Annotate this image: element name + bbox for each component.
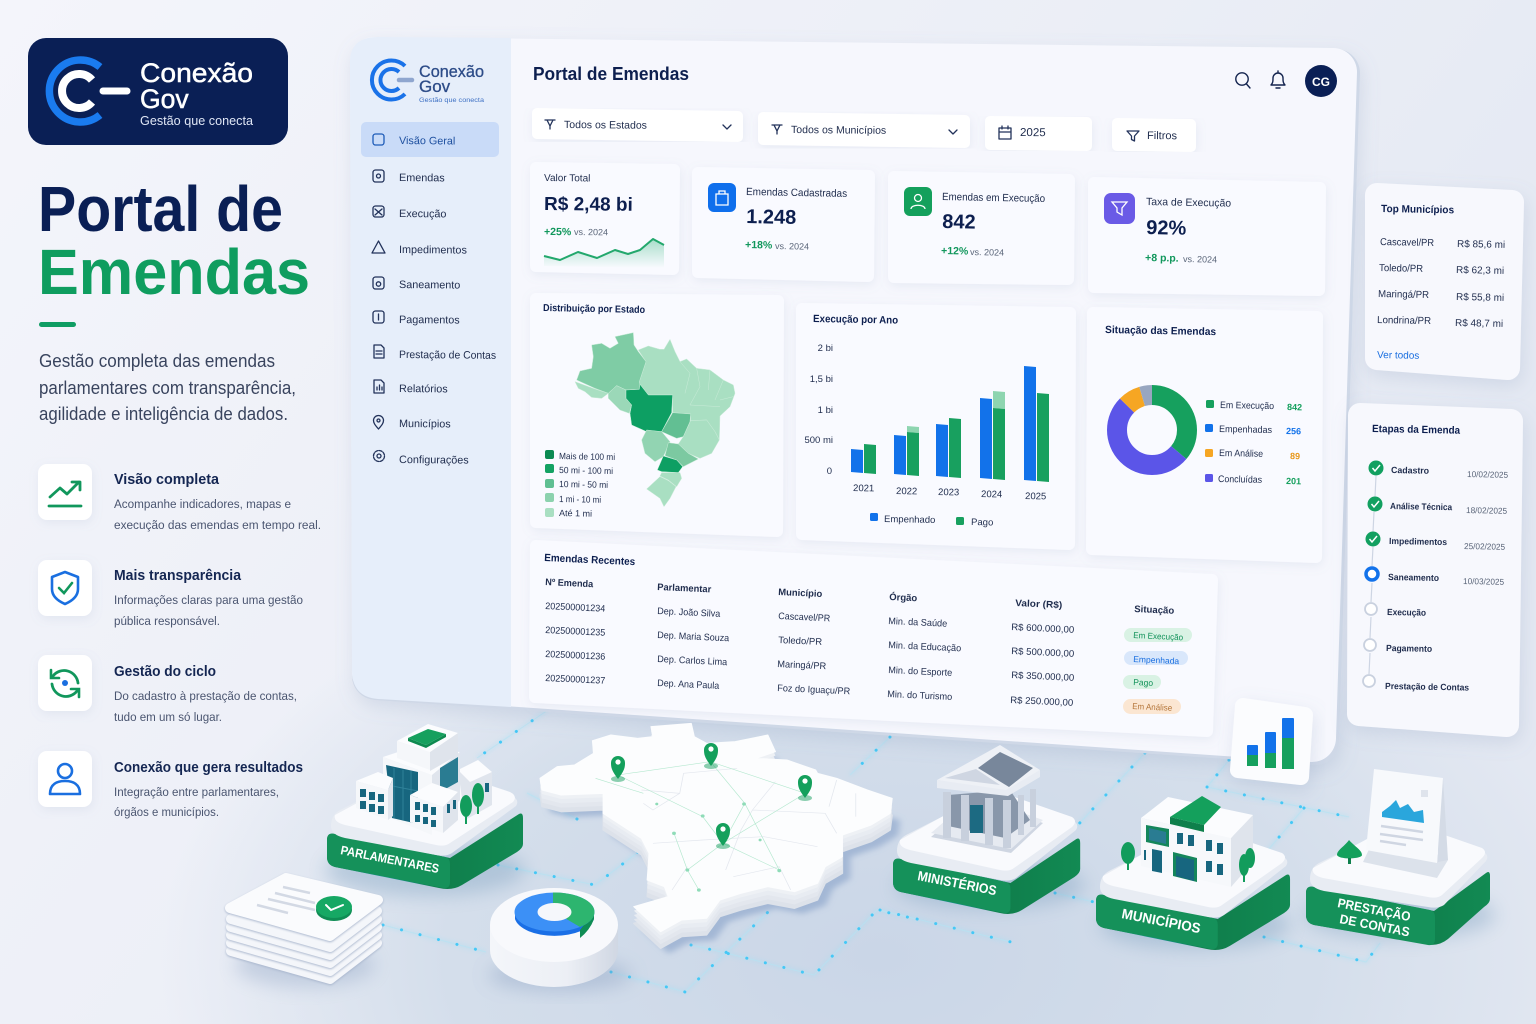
filter: estados (537, 113, 738, 137)
panel: execução por ano (802, 309, 1070, 544)
kpi: taxa de execução: +8 p.p. (1145, 252, 1179, 265)
feature: conexão que gera resultados (38, 751, 303, 819)
sidebar nav (361, 122, 499, 467)
donut legend: 256 (1286, 426, 1301, 436)
logo text: Gestão que conecta (140, 114, 253, 128)
bar chart (851, 366, 1049, 482)
filter button: Filtros (1147, 130, 1178, 142)
feature: gestão do ciclo: Do cadastro à prestação de contas, (114, 689, 297, 703)
panel: distribuição por estado (536, 299, 778, 531)
kpi: emendas cadastradas: +18% (745, 239, 773, 252)
feature: mais transparência: Mais transparência (114, 568, 242, 584)
building (356, 724, 492, 835)
feature: conexão que gera resultados: Integração entre parlamentares, (114, 785, 279, 799)
year labels: 2022 (896, 486, 917, 497)
sparkline (544, 239, 664, 268)
table row 1: Min. da Saúde (888, 616, 947, 630)
axis labels: 1 bi (818, 405, 833, 416)
nav item: municípios (374, 416, 451, 430)
platform: municípios: MUNICÍPIOS (1120, 905, 1202, 936)
label text (1336, 895, 1412, 940)
sidebar logo: Gestão que conecta (419, 97, 484, 104)
table header: Valor (R$) (1015, 598, 1062, 611)
step saneamento: Saneamento (1388, 572, 1440, 583)
trees (1121, 842, 1255, 882)
municipality rows: R$ 55,8 mi (1456, 292, 1504, 304)
municipality rows: R$ 62,3 mi (1456, 265, 1504, 277)
logo text: Conexão (140, 58, 253, 88)
kpi: taxa de execução: vs. 2024 (1183, 254, 1217, 265)
municipality rows (1377, 237, 1505, 330)
axis labels: 1,5 bi (810, 374, 833, 385)
feature: visão completa: Acompanhe indicadores, mapas e (114, 497, 291, 511)
step prestação de contas (1363, 675, 1469, 693)
table row 2: Dep. Maria Souza (657, 630, 730, 644)
nav item: impedimentos (372, 241, 468, 257)
nav item: saneamento: Saneamento (399, 279, 460, 292)
3D Brazil map (540, 723, 900, 954)
nav item: pagamentos (373, 311, 460, 327)
kpi: emendas em execução: vs. 2024 (970, 247, 1004, 258)
table row 4: Dep. Ana Paula (657, 678, 720, 692)
label text: PRESTAÇÃO (1336, 895, 1412, 924)
panel: etapas da emenda: Etapas da Emenda (1372, 423, 1460, 437)
kpi: emendas cadastradas: 1.248 (746, 206, 796, 229)
panel: situação das emendas: Situação das Emendas (1105, 324, 1216, 338)
nav item: prestação de contas (374, 345, 497, 362)
intro text: parlamentares com transparência, (39, 378, 296, 398)
icon: trend chart (38, 464, 92, 520)
map legend: 1 mi - 10 mi (559, 494, 601, 505)
nav item: pagamentos: Pagamentos (399, 314, 460, 327)
icon: purple chart (1104, 193, 1135, 224)
panel: execução por ano: Execução por Ano (813, 313, 898, 327)
table header (545, 577, 1175, 617)
map legend: Mais de 100 mi (559, 451, 615, 462)
icon: logo C (49, 60, 127, 122)
table header: Órgão (889, 591, 918, 604)
report document (1337, 769, 1448, 878)
step análise técnica: Análise Técnica (1390, 501, 1453, 512)
filter: municípios (763, 117, 965, 143)
logo text (140, 58, 253, 128)
icon: person (38, 751, 92, 807)
kpi: taxa de execução: 92% (1146, 217, 1187, 240)
nav item: municípios: Municípios (399, 418, 451, 430)
map legend: 50 mi - 100 mi (559, 465, 613, 476)
table row 2: 202500001235 (545, 625, 605, 639)
table row 1 (545, 601, 1192, 642)
icon: search (1236, 73, 1250, 88)
panel: etapas da emenda (1359, 415, 1511, 725)
sidebar logo: Conexão (419, 62, 484, 81)
nav item: prestação de contas: Prestação de Contas (399, 349, 497, 362)
kpi: emendas cadastradas: vs. 2024 (775, 241, 809, 252)
table row 3: Maringá/PR (777, 659, 827, 672)
timeline connector (1369, 476, 1376, 674)
feature: conexão que gera resultados: órgãos e municípios. (114, 805, 219, 819)
table header: Nº Emenda (545, 577, 594, 590)
table row 1: 202500001234 (545, 601, 605, 615)
feature: visão completa: Visão completa (114, 472, 220, 488)
kpi: emendas em execução: 842 (942, 211, 976, 234)
sidebar logo (372, 60, 484, 104)
icon: cycle arrows (38, 655, 92, 711)
municipality rows: R$ 85,6 mi (1457, 239, 1505, 251)
step saneamento: 10/03/2025 (1463, 576, 1504, 587)
platform: parlamentares (325, 724, 525, 896)
step impedimentos (1366, 532, 1505, 552)
intro text: agilidade e inteligência de dados. (39, 404, 288, 424)
3D donut (514, 892, 594, 938)
nav item: relatórios: Relatórios (399, 383, 448, 395)
donut chart (1117, 395, 1187, 465)
platform: ministérios: MINISTÉRIOS (916, 868, 998, 898)
nav item: emendas: Emendas (399, 172, 445, 184)
panel: situação das emendas (1092, 313, 1317, 557)
step prestação de contas: Prestação de Contas (1385, 681, 1469, 693)
map: Brazil choropleth (575, 333, 735, 507)
filter: year: 2025 (1020, 127, 1046, 139)
step cadastro: 10/02/2025 (1467, 469, 1508, 480)
table row 2: Toledo/PR (778, 635, 822, 648)
intro text (39, 351, 296, 424)
table header: Município (778, 587, 823, 600)
kpi: taxa de execução: Taxa de Execução (1146, 196, 1231, 210)
icon: bell (1271, 71, 1285, 88)
donut legend: 201 (1286, 476, 1301, 486)
feature: gestão do ciclo: tudo em um só lugar. (114, 710, 222, 724)
link ver todos: Ver todos (1377, 350, 1419, 362)
map legend: 10 mi - 50 mi (559, 479, 608, 490)
donut legend: Empenhadas (1219, 424, 1272, 436)
trees (460, 783, 484, 824)
year labels: 2024 (981, 489, 1002, 500)
kpi: emendas cadastradas (698, 173, 869, 276)
platform: prestação de contas (1305, 769, 1495, 945)
main title (38, 173, 310, 308)
year labels: 2023 (938, 487, 959, 498)
panel: top municípios (1377, 195, 1512, 368)
filter button (1117, 123, 1191, 147)
kpi: valor total: R$ 2,48 bi (544, 194, 633, 216)
table row 4: Min. do Turismo (887, 689, 952, 703)
feature: visão completa (38, 464, 321, 532)
check badge (316, 896, 352, 921)
green base (327, 814, 523, 889)
feature: mais transparência (38, 560, 303, 628)
kpi: emendas em execução (894, 177, 1069, 279)
user avatar (1305, 65, 1337, 97)
axis labels: 2 bi (818, 343, 833, 354)
feature: mais transparência: Informações claras para uma gestão (114, 593, 303, 607)
feature: gestão do ciclo (38, 655, 297, 724)
year labels: 2021 (853, 483, 874, 494)
step cadastro: Cadastro (1391, 465, 1430, 476)
table row 4: Em Análise (1132, 701, 1173, 713)
table row 1: Em Execução (1133, 630, 1184, 642)
table row 1: R$ 600.000,00 (1011, 622, 1074, 636)
feature: visão completa: execução das emendas em tempo real. (114, 518, 321, 532)
table row 2: Min. da Educação (888, 640, 961, 654)
table row 2: Empenhada (1133, 654, 1180, 666)
icon: blue folder (708, 183, 736, 212)
government building (931, 745, 1043, 853)
axis labels (804, 343, 833, 477)
kpi: emendas em execução: +12% (941, 245, 969, 258)
bar legend: Pago (971, 517, 993, 528)
table row 3: Dep. Carlos Lima (657, 654, 728, 668)
donut puck (488, 888, 632, 991)
table row 2: R$ 500.000,00 (1011, 646, 1074, 660)
step execução: Execução (1387, 607, 1427, 618)
document stack (230, 878, 378, 987)
panel: emendas recentes table (535, 546, 1212, 731)
kpi: valor total: vs. 2024 (574, 227, 608, 237)
table header: Situação (1134, 604, 1175, 617)
donut legend: Concluídas (1218, 474, 1262, 486)
nav item: configurações: Configurações (399, 454, 469, 467)
nav item: emendas (373, 170, 445, 184)
municipality rows: Maringá/PR (1378, 289, 1429, 301)
platform: municípios (1096, 796, 1290, 950)
sidebar background (350, 37, 511, 707)
kpi: valor total (536, 168, 674, 269)
municipality rows: Londrina/PR (1377, 315, 1431, 327)
nav item: execução: Execução (399, 208, 447, 220)
bar legend: Empenhado (884, 514, 935, 526)
panel: dashboard (230, 37, 1512, 991)
panel: emendas recentes table: Emendas Recentes (544, 552, 636, 568)
donut legend: 842 (1287, 402, 1302, 412)
user avatar: CG (1312, 75, 1330, 89)
brand logo card (28, 38, 288, 145)
nav item: execução (373, 206, 447, 220)
main title: Emendas (38, 236, 310, 308)
map legend (545, 450, 615, 519)
kpi: valor total: +25% (544, 226, 572, 238)
table row 1: Dep. João Silva (657, 606, 721, 620)
nav item: visão geral (373, 134, 455, 147)
step pagamento (1364, 639, 1433, 654)
table row 4 (545, 673, 1181, 714)
glowing network lines on the floor (383, 710, 1380, 992)
step análise técnica: 18/02/2025 (1466, 505, 1507, 516)
intro text: Gestão completa das emendas (39, 351, 275, 371)
municipality rows: Toledo/PR (1379, 263, 1423, 275)
panel: top municípios: Top Municípios (1381, 203, 1454, 216)
network links (596, 762, 805, 890)
nav item: saneamento (373, 277, 460, 292)
donut legend: Em Análise (1219, 448, 1263, 460)
axis labels: 500 mi (804, 435, 833, 446)
year labels: 2025 (1025, 491, 1046, 502)
map legend: Até 1 mi (559, 508, 592, 519)
icon: shield (38, 560, 92, 616)
feature: conexão que gera resultados: Conexão que gera resultados (114, 760, 303, 776)
logo text: Gov (140, 84, 189, 114)
bar legend (870, 513, 993, 528)
step saneamento (1366, 568, 1504, 587)
platform: parlamentares: PARLAMENTARES (339, 843, 440, 876)
table row 4: 202500001237 (545, 673, 605, 687)
year labels (853, 483, 1046, 502)
step execução (1365, 603, 1427, 618)
label text: DE CONTAS (1338, 911, 1411, 940)
step impedimentos: 25/02/2025 (1464, 541, 1505, 552)
table row 3: 202500001236 (545, 649, 605, 663)
map pins (611, 743, 812, 849)
filter: year (990, 121, 1087, 146)
table row 4: R$ 250.000,00 (1010, 695, 1073, 709)
nav item: configurações (374, 450, 469, 467)
step pagamento: Pagamento (1386, 643, 1433, 654)
green accent bar (39, 322, 76, 327)
table row 3: Pago (1133, 677, 1154, 688)
kpi: emendas em execução: Emendas em Execução (942, 191, 1045, 205)
kpi: taxa de execução (1094, 183, 1320, 290)
step impedimentos: Impedimentos (1389, 536, 1447, 547)
sidebar logo: Gov (419, 77, 451, 96)
main title: Portal de (38, 173, 283, 245)
filter: municípios: Todos os Municípios (791, 124, 886, 137)
donut legend (1205, 400, 1302, 486)
table row 4: Foz do Iguaçu/PR (777, 683, 851, 697)
municipality rows: Cascavel/PR (1380, 237, 1434, 249)
panel: distribuição por estado: Distribuição por Estado (543, 303, 645, 316)
table row 3: Min. do Esporte (888, 665, 952, 679)
state borders (641, 768, 856, 890)
nav item: impedimentos: Impedimentos (399, 244, 468, 257)
kpi: emendas cadastradas: Emendas Cadastradas (746, 186, 847, 200)
kpi: valor total: Valor Total (544, 173, 590, 184)
table row 2 (545, 625, 1188, 666)
filter: estados: Todos os Estados (564, 119, 647, 132)
step cadastro (1368, 460, 1508, 480)
table row 1: Cascavel/PR (778, 611, 831, 624)
feature: mais transparência: pública responsável. (114, 614, 220, 628)
feature: gestão do ciclo: Gestão do ciclo (114, 664, 216, 680)
nav item: relatórios (374, 380, 448, 395)
city hall building (1141, 796, 1253, 887)
white top (331, 768, 517, 856)
table header: Parlamentar (657, 582, 712, 595)
donut legend: 89 (1290, 451, 1300, 461)
table row 3: R$ 350.000,00 (1011, 670, 1074, 684)
dashboard heading: Portal de Emendas (533, 63, 689, 84)
step análise técnica (1368, 496, 1507, 516)
axis labels: 0 (827, 466, 832, 477)
municipality rows: R$ 48,7 mi (1455, 318, 1503, 330)
donut legend: Em Execução (1220, 400, 1274, 412)
table row 3 (545, 649, 1161, 689)
nav item: visão geral: Visão Geral (399, 135, 455, 147)
icon tile: bar chart (1238, 706, 1305, 777)
platform: ministérios (893, 745, 1085, 914)
icon: green person (904, 187, 932, 216)
